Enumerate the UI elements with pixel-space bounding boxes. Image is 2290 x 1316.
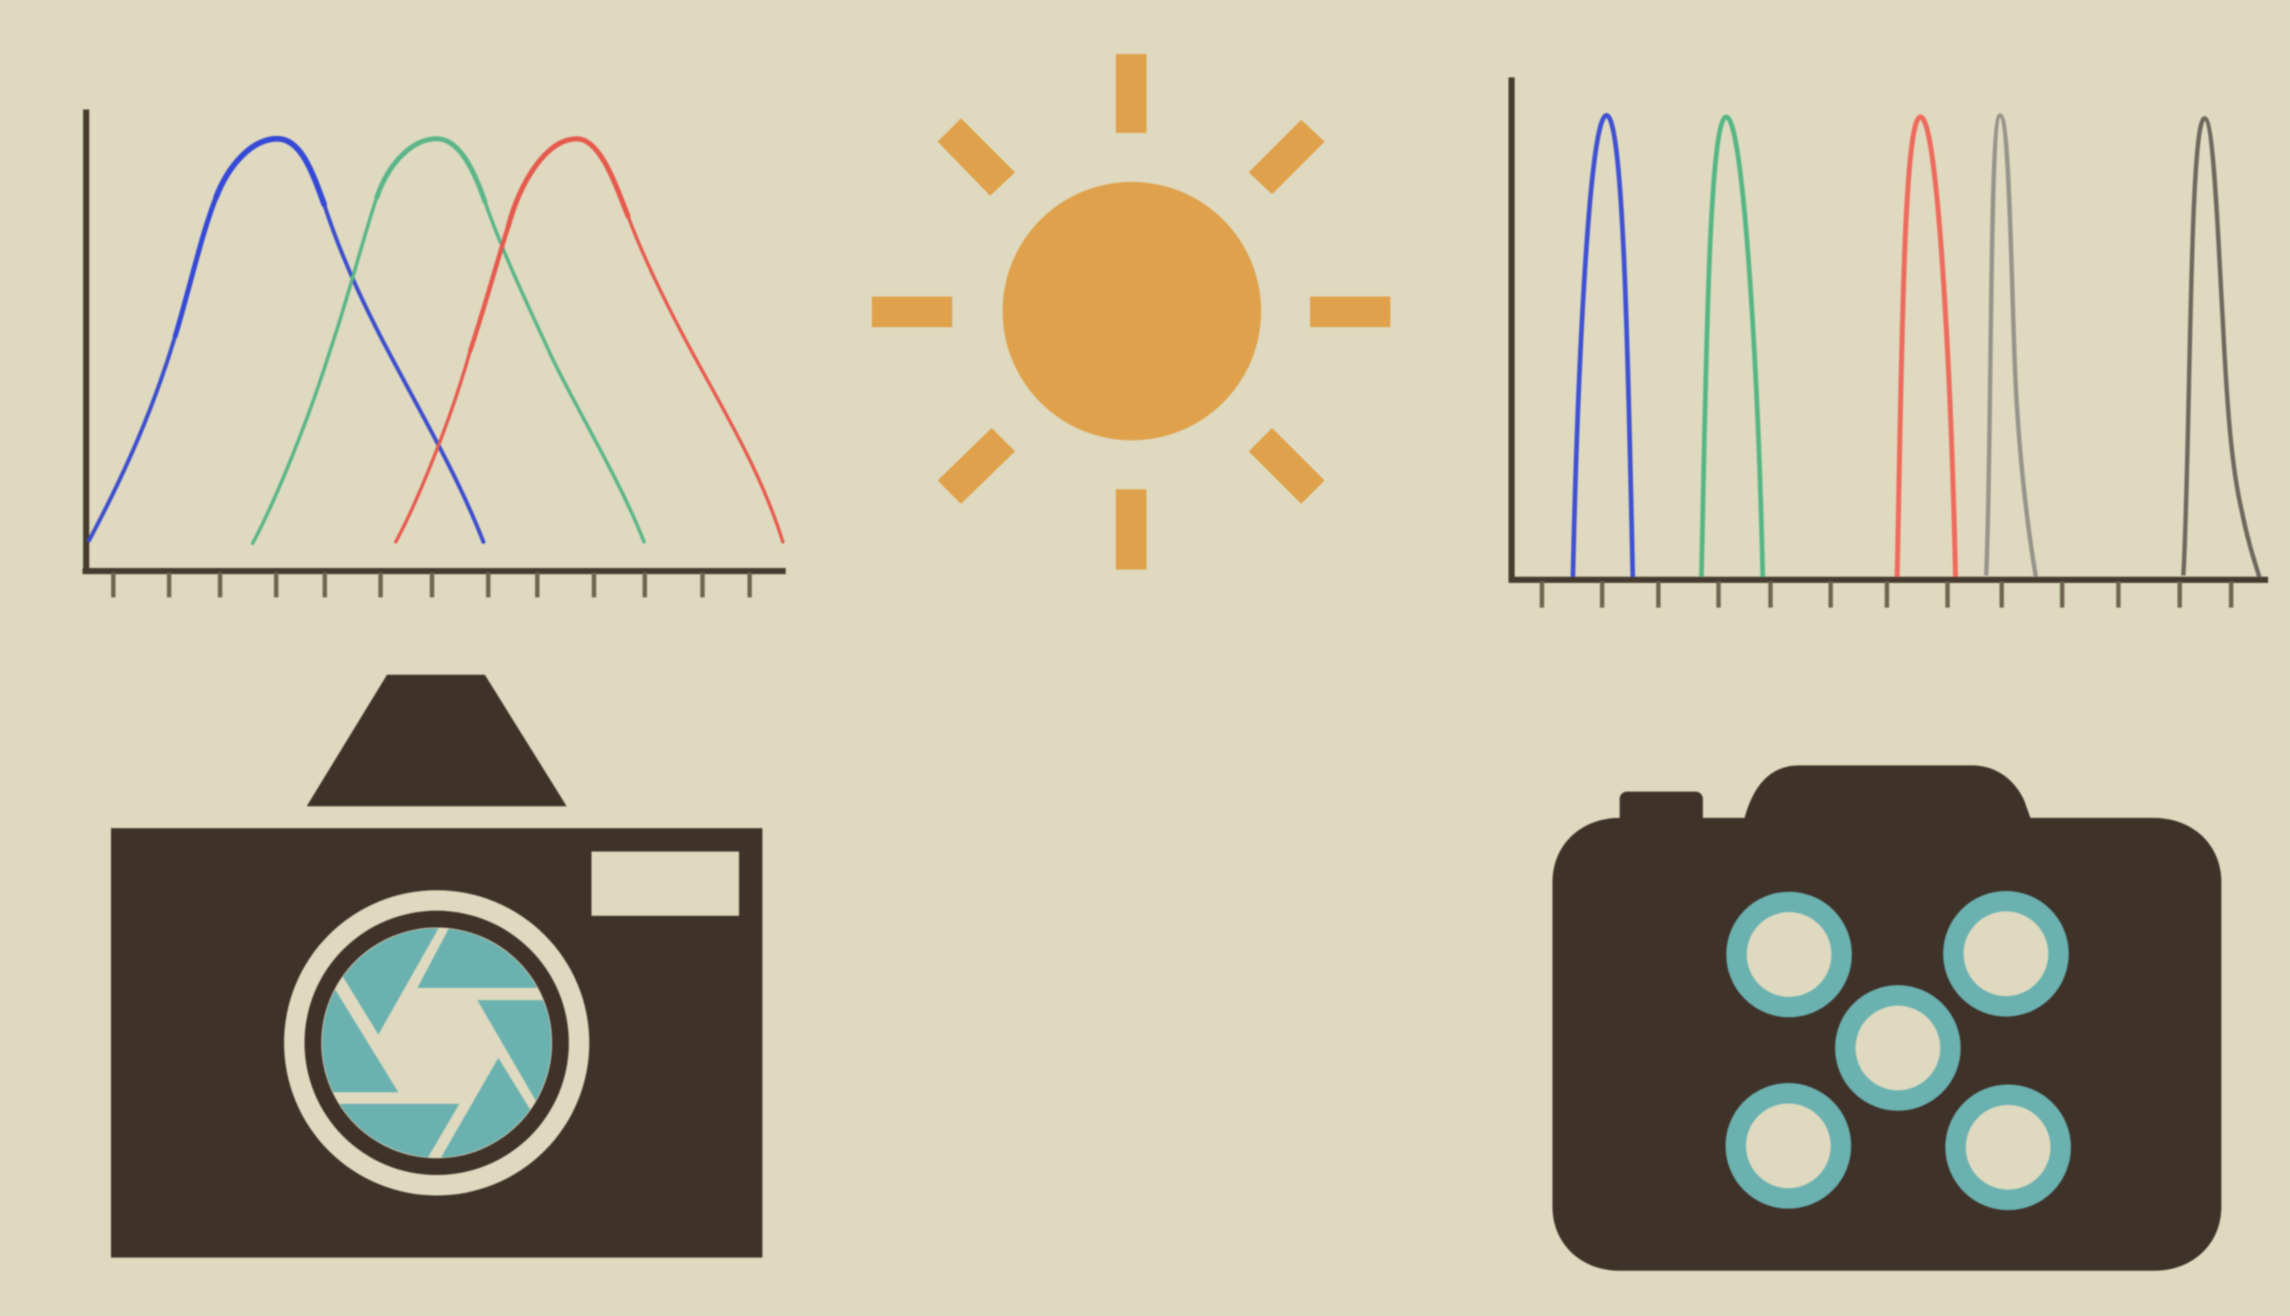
green band <box>1701 117 1763 577</box>
viewfinder prism <box>307 675 567 806</box>
icon: multi-lens camera <box>1552 765 2221 1271</box>
camera body <box>111 828 762 1258</box>
icon: sun <box>872 54 1390 570</box>
red band <box>1897 117 1956 577</box>
red curve <box>396 139 783 542</box>
chart: broad overlapping RGB sensitivity curves <box>83 110 786 597</box>
aperture blades <box>321 927 552 1158</box>
sun rays <box>872 54 1390 570</box>
viewfinder window <box>591 852 739 916</box>
sun disc <box>1003 182 1261 440</box>
light grey band <box>1986 115 2036 577</box>
axes with tick marks <box>83 110 786 597</box>
blue curve <box>89 139 483 542</box>
icon: single-lens camera <box>111 675 762 1258</box>
lens rings <box>284 890 589 1196</box>
dark grey band <box>2183 118 2259 577</box>
chart: narrow multispectral band curves <box>1509 77 2268 608</box>
axes with tick marks <box>1509 77 2268 608</box>
blue band <box>1573 115 1633 577</box>
five lenses <box>1736 901 2061 1200</box>
camera silhouette <box>1552 765 2221 1271</box>
green curve <box>253 139 644 543</box>
